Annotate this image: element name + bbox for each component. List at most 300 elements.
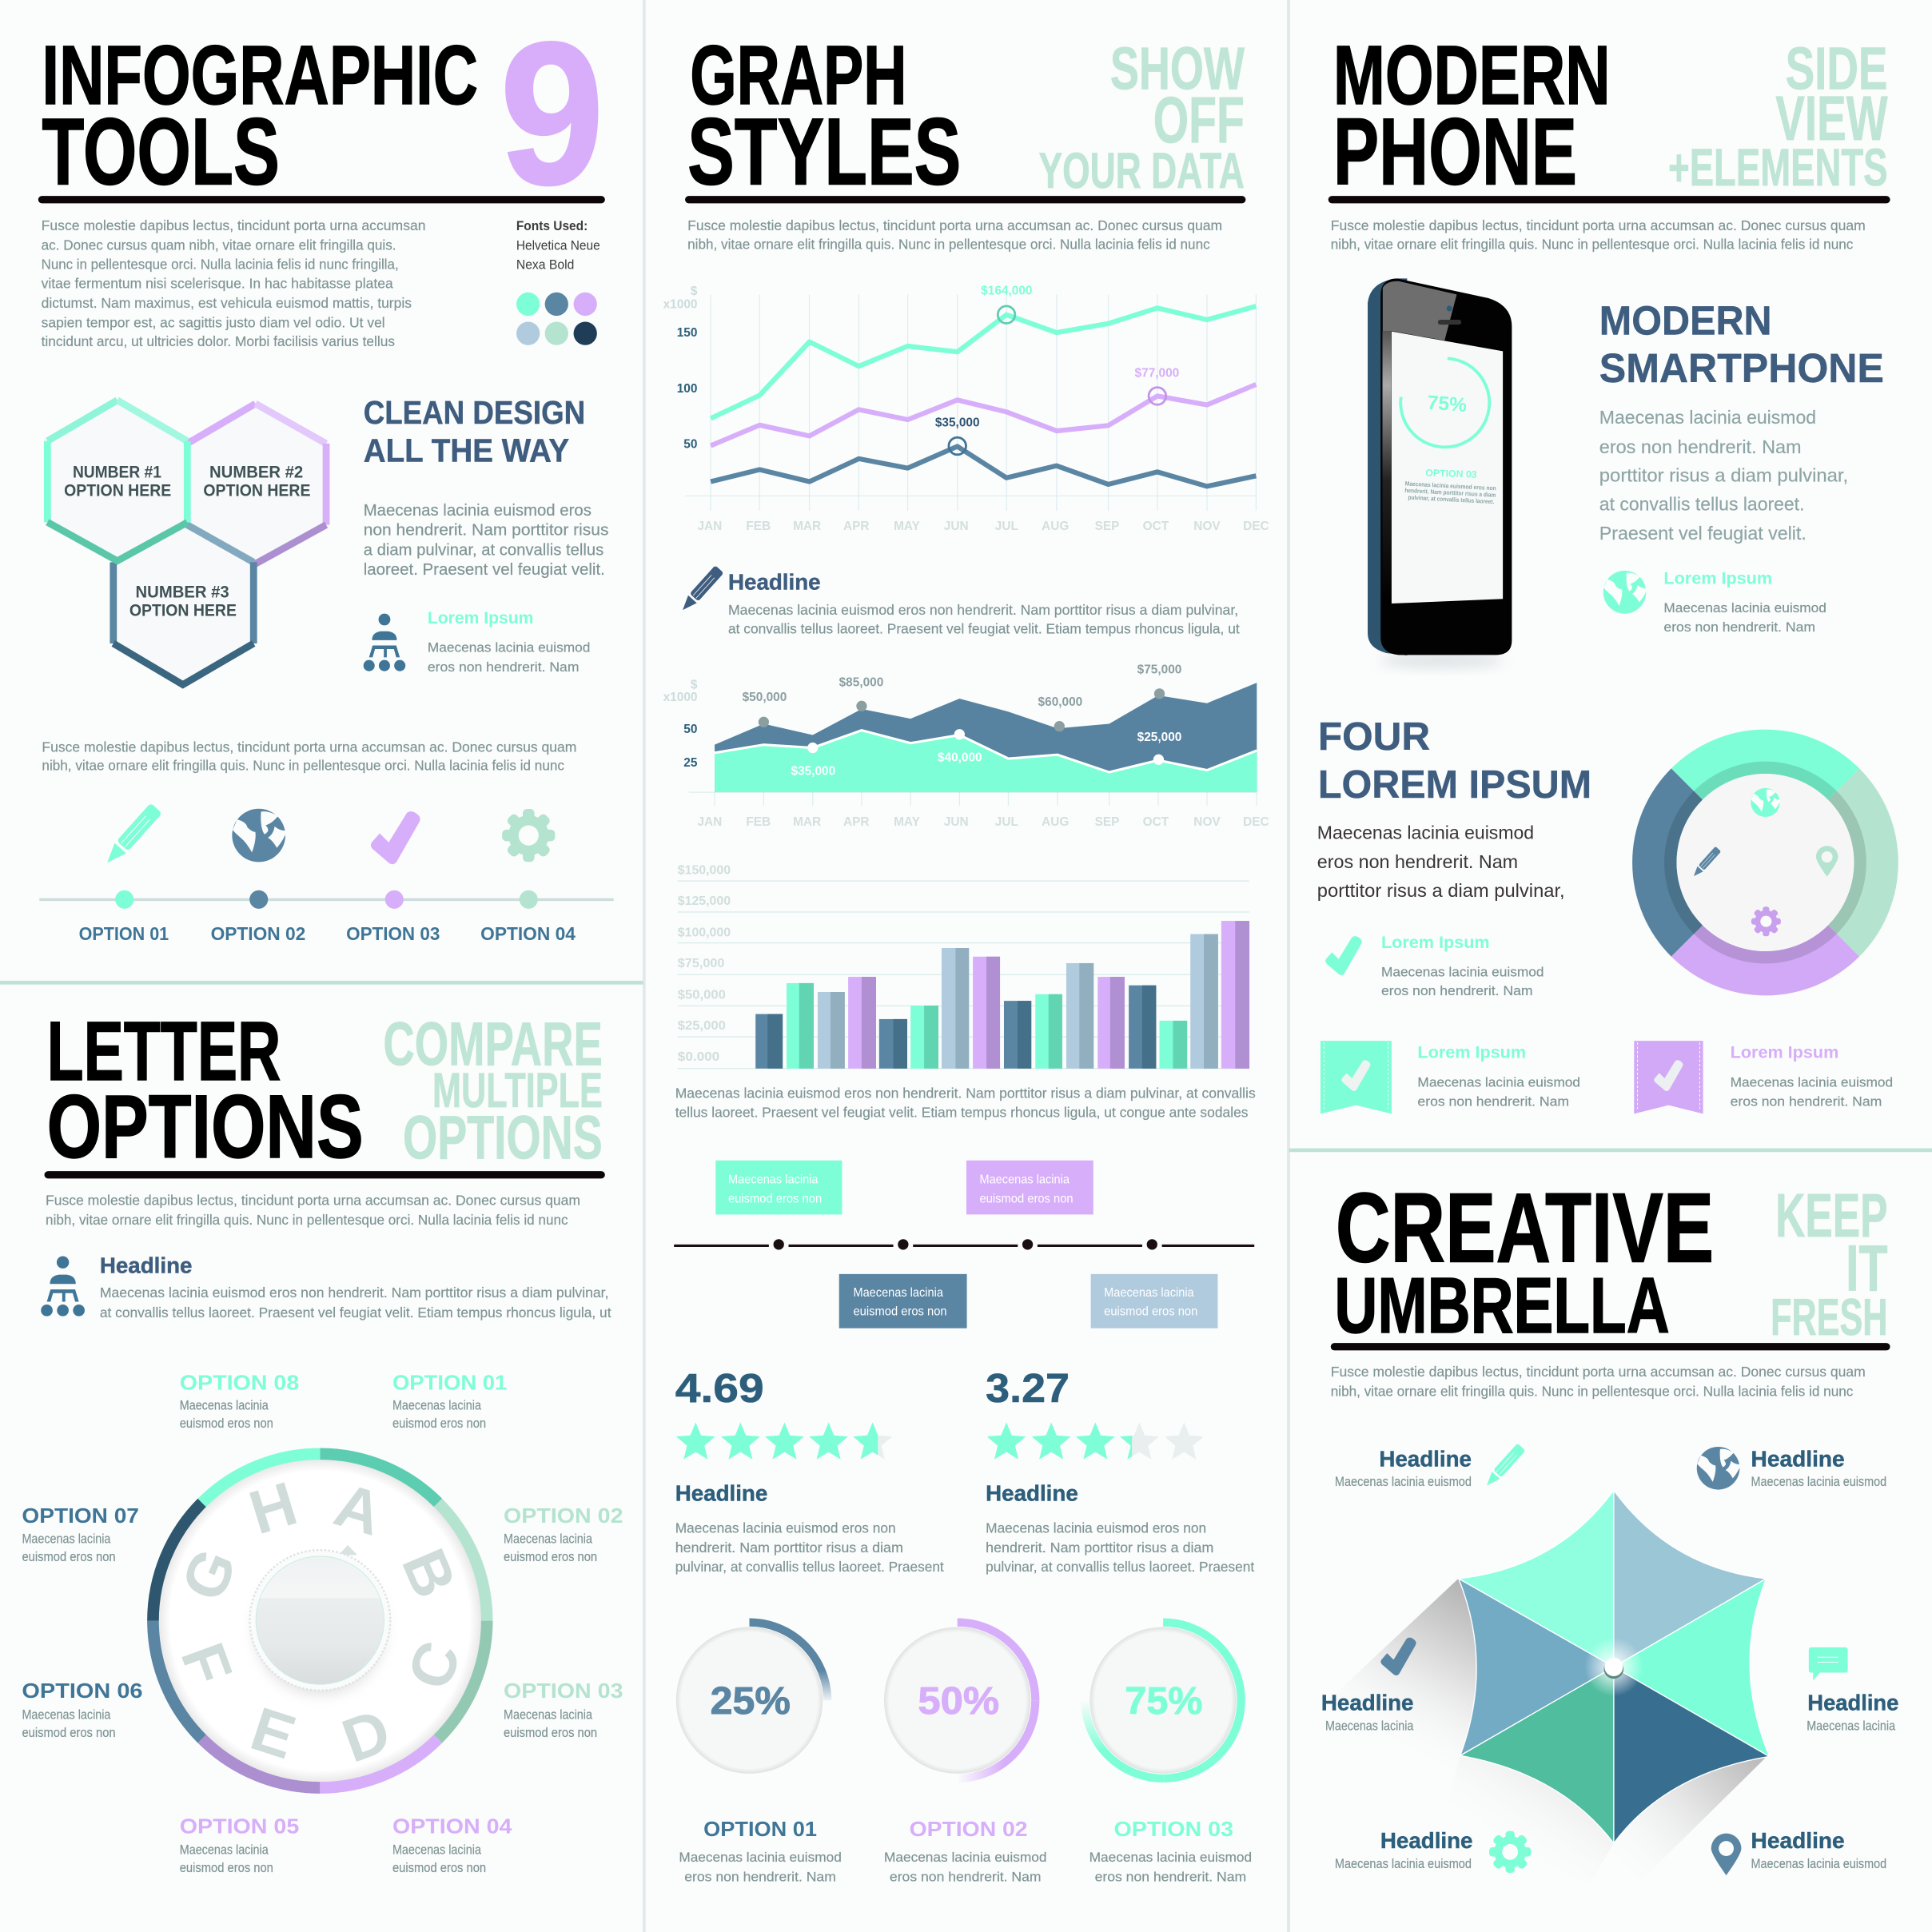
panel: modern phone (1317, 29, 1893, 1113)
icon: check (1325, 936, 1362, 975)
intro paragraph (1331, 1364, 1866, 1399)
callout: lorem ipsum: Lorem Ipsum (1381, 932, 1490, 952)
subtitle: show off your data (1038, 36, 1245, 199)
headline block: Headline (728, 570, 821, 595)
option 05 (180, 1814, 299, 1875)
month labels: JAN (697, 815, 722, 829)
label: bottom left (1335, 1828, 1473, 1871)
label: right (1807, 1691, 1898, 1734)
option 04: Maecenas lacinia (392, 1843, 481, 1858)
callout: lorem ipsum purple: Lorem Ipsum (1731, 1042, 1838, 1062)
callout: lorem ipsum purple: eros non hendrerit. Nam (1731, 1094, 1882, 1109)
intro paragraph: ac. Donec cursus quam nibh, vitae ornare elit fringilla quis. (42, 237, 396, 253)
headline block (100, 1253, 611, 1321)
area: teal series (715, 731, 1257, 792)
donut diagram (1655, 751, 1876, 974)
heading: clean design: ALL THE WAY (364, 432, 569, 468)
intro paragraph: Fusce molestie dapibus lectus, tincidunt porta urna accumsan ac. Donec cursus quam (46, 1193, 580, 1209)
rating: 4.69: 4.69 (675, 1365, 764, 1411)
wheel option labels (22, 1371, 623, 1875)
y axis labels: x1000 (663, 691, 697, 704)
panel: letter options (22, 1005, 623, 1875)
area labels: $60,000 (1038, 695, 1082, 709)
intro paragraph (687, 217, 1222, 252)
month labels: APR (843, 815, 870, 829)
title: modern phone (1333, 29, 1611, 205)
subtitle: show off your data: OFF (1153, 84, 1245, 157)
panel: graph styles (663, 29, 1269, 1884)
label: top left: Maecenas lacinia euismod (1335, 1475, 1472, 1489)
label: left (1321, 1691, 1414, 1734)
option 07: Maecenas lacinia (22, 1532, 110, 1547)
gauge: 50% (884, 1623, 1046, 1884)
gauge: 25%: Maecenas lacinia euismod (679, 1850, 842, 1865)
centre knob (249, 1550, 390, 1695)
option 04 (392, 1814, 512, 1875)
gauge: 25% (676, 1623, 842, 1884)
callout: lorem ipsum (1381, 932, 1544, 998)
hexagon labels: OPTION HERE (203, 481, 311, 500)
title: infographic tools (42, 29, 478, 205)
timeline box 4: euismod eros non (1104, 1305, 1197, 1319)
option 07 (22, 1504, 139, 1564)
phone screen: pulvinar, at convallis tellus laoreet. (1408, 494, 1495, 505)
month labels: JUL (995, 520, 1018, 533)
callout: lorem ipsum teal: eros non hendrerit. Nam (1417, 1094, 1569, 1109)
stars (987, 1422, 1204, 1460)
intro paragraph: nibh, vitae ornare elit fringilla quis. Nunc in pellentesque orci. Nulla lacinia felis id nunc (687, 236, 1210, 252)
intro paragraph: Fusce molestie dapibus lectus, tincidunt porta urna accumsan ac. Donec cursus quam (1331, 217, 1866, 233)
callout: lorem ipsum: Maecenas lacinia euismod (1663, 601, 1826, 615)
gauge: 75%: 75% (1125, 1680, 1202, 1723)
timeline box 4 (1091, 1274, 1217, 1328)
bar axis labels (678, 864, 731, 1064)
wheel letters: F (168, 1635, 245, 1693)
option 07: OPTION 07 (22, 1504, 139, 1528)
headline block (728, 570, 1240, 636)
option 01 (392, 1371, 507, 1431)
umbrella diagram (1306, 1490, 1770, 1904)
ribbon badge: teal (1321, 1041, 1392, 1113)
month labels: JUL (995, 815, 1018, 829)
intro paragraph: Fusce molestie dapibus lectus, tincidunt porta urna accumsan (42, 217, 426, 233)
option 05: euismod eros non (180, 1861, 273, 1875)
gauge: 25%: eros non hendrerit. Nam (684, 1870, 836, 1884)
month labels (697, 815, 1269, 829)
bar axis labels: $150,000 (678, 864, 731, 878)
donut icons (1691, 788, 1838, 936)
callout: lorem ipsum teal: Lorem Ipsum (1417, 1042, 1526, 1062)
fonts used note: Nexa Bold (516, 257, 574, 273)
icon: globe (1603, 571, 1647, 614)
subtitle: side view elements: VIEW (1775, 83, 1888, 153)
month labels (697, 520, 1269, 533)
headline block: Headline (100, 1253, 192, 1277)
paragraph: four lorem ipsum: porttitor risus a diam pulvinar, (1317, 880, 1565, 901)
label: bottom left: Maecenas lacinia euismod (1335, 1857, 1472, 1871)
timeline box 2: euismod eros non (979, 1192, 1074, 1205)
label: top right (1751, 1446, 1886, 1489)
line: blue series (711, 446, 1256, 486)
title: letter options: LETTER (47, 1005, 281, 1098)
label: left: Maecenas lacinia (1325, 1719, 1413, 1734)
label: top right: Headline (1751, 1446, 1845, 1471)
option 03: OPTION 03 (504, 1679, 623, 1703)
subtitle: side view elements (1668, 36, 1888, 197)
callout: lorem ipsum teal (1417, 1042, 1580, 1109)
month labels: SEP (1095, 815, 1119, 829)
option timeline (39, 803, 614, 944)
option 02: euismod eros non (504, 1550, 597, 1564)
y axis labels: 100 (677, 382, 697, 396)
stars (676, 1422, 892, 1460)
hexagon labels: OPTION HERE (129, 602, 237, 620)
gauge: 50%: eros non hendrerit. Nam (890, 1870, 1042, 1884)
paragraph: clean design: Maecenas lacinia euismod eros (364, 502, 592, 520)
icon: pen (1483, 1444, 1525, 1489)
icon: pen (102, 803, 162, 868)
month labels: MAY (894, 520, 921, 533)
month labels: JAN (697, 520, 722, 533)
intro paragraph: sapien tempor est, ac sagittis justo diam vel odio. Ut vel (42, 314, 385, 330)
timeline box 1 (715, 1161, 842, 1214)
title: modern phone: MODERN (1333, 29, 1611, 122)
bar axis labels: $25,000 (678, 1019, 726, 1033)
hexagon labels: NUMBER #2 (209, 463, 303, 481)
title: graph styles: GRAPH (690, 29, 907, 122)
rating: 3.27 (986, 1365, 1254, 1575)
label: top left (1335, 1446, 1472, 1489)
title: modern phone: PHONE (1333, 99, 1577, 205)
wheel letters: C (395, 1632, 474, 1698)
gauge: 50%: 50% (918, 1680, 999, 1723)
subtitle: show off your data: SHOW (1110, 36, 1245, 103)
timeline box 3 (839, 1274, 967, 1328)
timeline box 2: Maecenas lacinia (979, 1173, 1070, 1187)
colour palette swatches (516, 293, 597, 345)
area markers (759, 688, 1165, 765)
line: purple series (711, 384, 1256, 446)
paragraph: four lorem ipsum (1317, 823, 1565, 901)
big number 9: 9 (500, 0, 604, 227)
month labels: FEB (746, 520, 771, 533)
paragraph: clean design (364, 502, 608, 579)
heading: modern smartphone: SMARTPHONE (1599, 345, 1884, 391)
data labels (935, 284, 1179, 429)
title rule (44, 1171, 605, 1178)
intro paragraph (46, 1193, 580, 1228)
callout: lorem ipsum teal: Maecenas lacinia euismod (1417, 1076, 1580, 1090)
phone screen: OPTION 03 (1425, 467, 1477, 480)
area labels: $25,000 (1137, 731, 1181, 744)
rating: 3.27: hendrerit. Nam porttitor risus a diam (986, 1540, 1213, 1556)
gauge: 75%: Maecenas lacinia euismod (1089, 1850, 1252, 1865)
timeline box 2 (966, 1161, 1093, 1214)
y axis labels: $ (691, 285, 698, 298)
rating: 3.27: Maecenas lacinia euismod eros non (986, 1520, 1206, 1536)
fonts used note (516, 218, 600, 273)
icon: organisation (41, 1257, 85, 1317)
option 08 (180, 1371, 299, 1431)
wheel letters: H (242, 1469, 305, 1548)
label: bottom right (1751, 1828, 1886, 1871)
intro paragraph: dictumst. Nam maximus, est vehicula euismod mattis, turpis (42, 295, 412, 311)
y axis labels: 50 (683, 723, 697, 736)
intro paragraph: nibh, vitae ornare elit fringilla quis. Nunc in pellentesque orci. Nulla lacinia felis id nunc (46, 1212, 568, 1228)
wheel letters: E (243, 1695, 303, 1772)
subtitle: show off your data: YOUR DATA (1038, 143, 1245, 199)
icon: organisation (364, 614, 405, 671)
option 02: Maecenas lacinia (504, 1532, 592, 1547)
bars (755, 921, 1249, 1069)
month labels: DEC (1243, 520, 1269, 533)
paragraph: lower intro (42, 739, 576, 773)
area: blue series (715, 683, 1257, 792)
intro paragraph: tincidunt arcu, ut ultricies dolor. Morbi facilisis varius tellus (42, 333, 395, 349)
option 02 (504, 1504, 623, 1564)
bar axis labels: $50,000 (678, 988, 726, 1002)
bar axis labels: $0.000 (678, 1050, 719, 1064)
option 03: Maecenas lacinia (504, 1707, 592, 1722)
option 06: euismod eros non (22, 1726, 116, 1740)
label: top left: Headline (1379, 1446, 1472, 1471)
y axis labels: 25 (683, 756, 698, 770)
timeline box 3: Maecenas lacinia (853, 1286, 943, 1300)
option 04: euismod eros non (392, 1861, 486, 1875)
timeline labels: OPTION 02 (211, 923, 305, 944)
label: top right: Maecenas lacinia euismod (1751, 1475, 1886, 1489)
wheel letters: D (333, 1696, 399, 1776)
data labels: $77,000 (1135, 367, 1179, 380)
timeline box 1: Maecenas lacinia (728, 1173, 819, 1187)
ring segments (153, 1454, 487, 1787)
timeline labels: OPTION 03 (346, 923, 440, 944)
timeline labels (79, 923, 576, 944)
month labels: OCT (1143, 815, 1169, 829)
heading: modern smartphone: MODERN (1599, 298, 1772, 344)
y axis labels: 150 (677, 326, 697, 340)
timeline dots (115, 890, 538, 909)
headline block: at convallis tellus laoreet. Praesent vel feugiat velit. Etiam tempus rhoncus ligula, ut (100, 1305, 611, 1321)
callout: lorem ipsum: eros non hendrerit. Nam (1381, 984, 1533, 998)
wheel letters: G (169, 1540, 250, 1610)
option 03: euismod eros non (504, 1726, 597, 1740)
area labels: $35,000 (791, 765, 835, 779)
timeline (674, 1161, 1254, 1328)
paragraph: lower intro: nibh, vitae ornare elit fringilla quis. Nunc in pellentesque orci. Nulla lacinia felis id nunc (42, 757, 564, 773)
line chart (663, 284, 1269, 533)
callout: lorem ipsum: Maecenas lacinia euismod (1381, 965, 1544, 979)
rating: 3.27: pulvinar, at convallis tellus laoreet. Praesent (986, 1559, 1254, 1575)
subtitle: compare multiple options (383, 1010, 603, 1173)
area labels (743, 663, 1181, 779)
title: creative umbrella: UMBRELLA (1334, 1261, 1670, 1349)
phone screen (1392, 332, 1503, 604)
area labels: $75,000 (1137, 663, 1181, 676)
rating: 4.69: hendrerit. Nam porttitor risus a diam (675, 1540, 903, 1556)
month labels: JUN (944, 520, 969, 533)
timeline box 3: euismod eros non (853, 1305, 947, 1319)
callout: lorem ipsum (1663, 568, 1826, 635)
intro paragraph: Nunc in pellentesque orci. Nulla lacinia felis id nunc fringilla, (42, 257, 399, 273)
title: letter options: OPTIONS (47, 1076, 364, 1177)
gauge: 50%: OPTION 02 (910, 1817, 1028, 1841)
option 01: OPTION 01 (392, 1371, 507, 1395)
month labels: FEB (746, 815, 771, 829)
heading: four lorem ipsum (1318, 715, 1591, 807)
callout: lorem ipsum (428, 607, 590, 675)
subtitle: keep it fresh: IT (1846, 1233, 1888, 1305)
paragraph: smartphone: porttitor risus a diam pulvinar, (1599, 465, 1848, 486)
intro paragraph: nibh, vitae ornare elit fringilla quis. Nunc in pellentesque orci. Nulla lacinia felis id nunc (1331, 236, 1853, 252)
bar axis labels: $75,000 (678, 957, 724, 970)
gauge: 25%: 25% (711, 1680, 791, 1723)
paragraph: lower intro: Fusce molestie dapibus lectus, tincidunt porta urna accumsan ac. Donec cursus quam (42, 739, 576, 755)
month labels: SEP (1095, 520, 1119, 533)
month labels: JUN (944, 815, 969, 829)
title: creative umbrella: CREATIVE (1336, 1173, 1714, 1283)
gauge: 75%: OPTION 03 (1113, 1817, 1233, 1841)
month labels: NOV (1193, 520, 1221, 533)
paragraph: clean design: non hendrerit. Nam porttitor risus (364, 522, 608, 540)
wheel letters: A (327, 1470, 390, 1549)
label: right: Maecenas lacinia (1807, 1719, 1895, 1734)
hexagon cluster (47, 400, 326, 685)
area labels: $50,000 (743, 691, 787, 704)
line: teal series (711, 306, 1256, 418)
icon: check (1380, 1638, 1416, 1675)
bar chart caption: tellus laoreet. Praesent vel feugiat velit. Etiam tempus rhoncus ligula, ut congue ante sodales (675, 1104, 1249, 1120)
rating: 3.27: Headline (986, 1480, 1078, 1505)
month labels: OCT (1143, 520, 1169, 533)
panel: creative umbrella (1306, 1173, 1898, 1904)
area chart (663, 663, 1269, 829)
callout: lorem ipsum: Maecenas lacinia euismod (428, 640, 590, 655)
data labels: $164,000 (981, 284, 1033, 297)
paragraph: clean design: a diam pulvinar, at convallis tellus (364, 541, 604, 559)
icon: globe (1697, 1447, 1741, 1490)
title rule (1331, 1343, 1890, 1350)
subtitle: compare multiple options: OPTIONS (403, 1104, 603, 1173)
label: bottom left: Headline (1380, 1828, 1473, 1853)
paragraph: smartphone: at convallis tellus laoreet. (1599, 493, 1804, 514)
month labels: DEC (1243, 815, 1269, 829)
subtitle: keep it fresh (1771, 1181, 1888, 1346)
y axis labels (663, 679, 698, 770)
paragraph: four lorem ipsum: Maecenas lacinia euismod (1317, 823, 1534, 843)
phone screen: 75% (1427, 392, 1468, 416)
option 01: euismod eros non (392, 1416, 486, 1431)
area labels: $85,000 (839, 676, 883, 690)
intro paragraph: Fusce molestie dapibus lectus, tincidunt porta urna accumsan ac. Donec cursus quam (1331, 1364, 1866, 1380)
icon: speech bubble (1809, 1647, 1848, 1681)
icon: pen (679, 565, 723, 614)
intro paragraph: nibh, vitae ornare elit fringilla quis. Nunc in pellentesque orci. Nulla lacinia felis id nunc (1331, 1383, 1853, 1399)
title rule (38, 196, 605, 203)
bar axis labels: $100,000 (678, 926, 731, 940)
icon: gear (502, 809, 555, 862)
month labels: MAY (894, 815, 921, 829)
rating: 3.27: 3.27 (986, 1365, 1070, 1411)
callout: lorem ipsum purple (1731, 1042, 1893, 1109)
option 03 (504, 1679, 623, 1740)
paragraph: smartphone: Maecenas lacinia euismod (1599, 407, 1816, 428)
phone screen: Maecenas lacinia euismod eros non (1405, 480, 1496, 492)
timeline labels: OPTION 01 (79, 923, 169, 944)
icon: pin (1711, 1834, 1741, 1875)
icon: globe (232, 809, 287, 862)
y axis labels: $ (691, 679, 698, 692)
callout: lorem ipsum purple: Maecenas lacinia euismod (1731, 1076, 1893, 1090)
headline block: Maecenas lacinia euismod eros non hendrerit. Nam porttitor risus a diam pulvinar, (100, 1285, 608, 1301)
title rule (685, 196, 1245, 203)
hexagon labels: NUMBER #3 (136, 584, 229, 602)
gauge: 75% (1086, 1623, 1252, 1884)
callout: lorem ipsum: Lorem Ipsum (428, 607, 533, 627)
option 06 (22, 1679, 143, 1740)
intro paragraph (42, 217, 426, 349)
heading: clean design: CLEAN DESIGN (364, 394, 585, 431)
rating: 4.69 (675, 1365, 944, 1575)
option 08: euismod eros non (180, 1416, 273, 1431)
heading: four lorem ipsum: FOUR (1318, 715, 1430, 759)
paragraph: clean design: laoreet. Praesent vel feugiat velit. (364, 561, 605, 579)
hexagon labels (64, 463, 311, 620)
option 06: OPTION 06 (22, 1679, 143, 1703)
ribbon badge: purple (1634, 1041, 1703, 1113)
rating: 4.69: Maecenas lacinia euismod eros non (675, 1520, 896, 1536)
callout: lorem ipsum: eros non hendrerit. Nam (428, 660, 579, 675)
label: left: Headline (1321, 1691, 1414, 1715)
panel: infographic tools (38, 0, 614, 944)
callout: lorem ipsum: Lorem Ipsum (1663, 568, 1772, 588)
title: infographic tools: INFOGRAPHIC (42, 29, 478, 122)
y axis labels: 50 (683, 437, 697, 451)
icon: check (371, 811, 420, 864)
smartphone illustration (1368, 278, 1512, 667)
option 02: OPTION 02 (504, 1504, 623, 1528)
label: right: Headline (1807, 1691, 1898, 1715)
title: creative umbrella (1334, 1173, 1714, 1349)
callout: lorem ipsum: eros non hendrerit. Nam (1663, 620, 1815, 635)
heading: four lorem ipsum: LOREM IPSUM (1318, 763, 1591, 807)
heading: modern smartphone (1599, 298, 1884, 391)
month labels: NOV (1193, 815, 1221, 829)
heading: clean design (364, 394, 585, 468)
data markers (949, 306, 1166, 455)
option 04: OPTION 04 (392, 1814, 512, 1838)
y axis labels: x1000 (663, 297, 697, 311)
title: graph styles (687, 29, 961, 205)
title: infographic tools: TOOLS (42, 99, 280, 205)
intro paragraph: Fusce molestie dapibus lectus, tincidunt porta urna accumsan ac. Donec cursus quam (687, 217, 1222, 233)
paragraph: smartphone: Praesent vel feugiat velit. (1599, 523, 1807, 544)
option 01: Maecenas lacinia (392, 1398, 481, 1412)
month labels: APR (843, 520, 870, 533)
paragraph: smartphone (1599, 407, 1848, 544)
subtitle: compare multiple options: COMPARE (383, 1010, 603, 1079)
rating: 4.69: pulvinar, at convallis tellus laoreet. Praesent (675, 1559, 944, 1575)
gauge: 75%: eros non hendrerit. Nam (1095, 1870, 1246, 1884)
title: graph styles: STYLES (687, 99, 961, 205)
option 05: Maecenas lacinia (180, 1843, 269, 1858)
bar axis labels: $125,000 (678, 894, 731, 908)
wheel letters (168, 1469, 474, 1776)
data labels: $35,000 (935, 416, 980, 429)
phone screen: hendrerit. Nam porttitor risus a diam (1404, 487, 1496, 499)
letter wheel (150, 1451, 490, 1791)
gauge: 50%: Maecenas lacinia euismod (884, 1850, 1046, 1865)
